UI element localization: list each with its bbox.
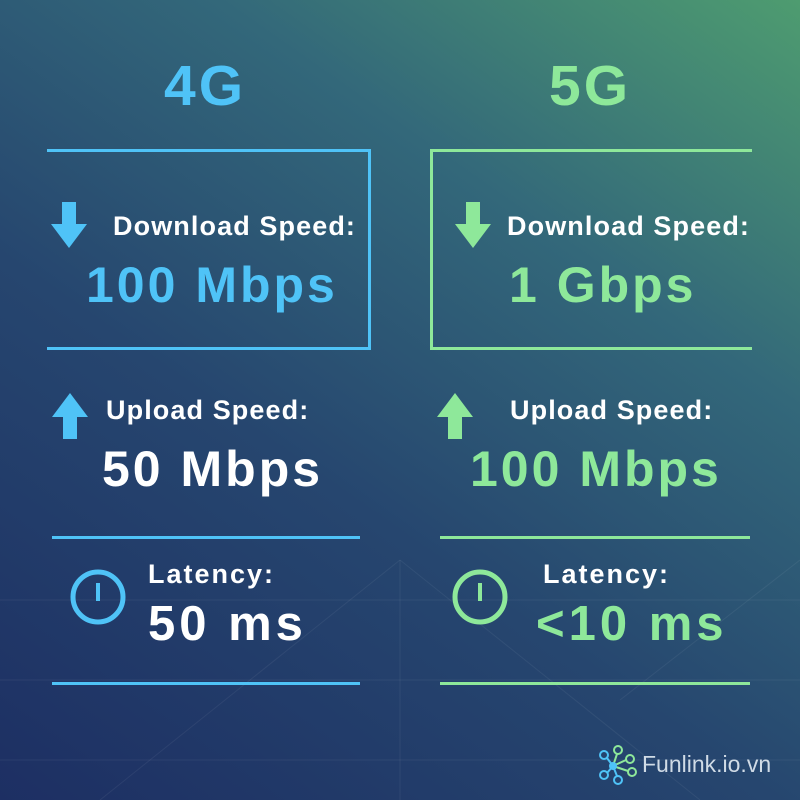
panel: 4G download bbox=[47, 149, 371, 350]
icon: up arrow bbox=[52, 393, 88, 439]
panel: 5G download bbox=[430, 149, 752, 350]
4G upload bbox=[52, 393, 323, 497]
title: 4G: 4G bbox=[164, 54, 246, 118]
label: Download Speed: bbox=[507, 211, 750, 241]
5G latency: <10 ms bbox=[536, 597, 728, 651]
5G upload: Upload Speed: bbox=[510, 395, 713, 425]
label: Download Speed: bbox=[113, 211, 356, 241]
value: 1 Gbps bbox=[509, 257, 696, 313]
4G latency bbox=[70, 559, 307, 651]
4G latency: 50 ms bbox=[148, 597, 307, 651]
5G upload: 100 Mbps bbox=[470, 441, 722, 497]
icon: clock bbox=[452, 570, 508, 624]
5G upload bbox=[437, 393, 722, 497]
4G upload: 50 Mbps bbox=[102, 441, 323, 497]
icon: network bbox=[599, 745, 637, 785]
title: 5G: 5G bbox=[549, 54, 631, 118]
icon: down arrow bbox=[51, 202, 87, 248]
icon: down arrow bbox=[455, 202, 491, 248]
5G latency: Latency: bbox=[543, 559, 670, 589]
icon: clock bbox=[70, 570, 126, 624]
value: 100 Mbps bbox=[86, 257, 338, 313]
4G latency: Latency: bbox=[148, 559, 275, 589]
logo: Funlink.io.vn bbox=[642, 751, 771, 777]
5G latency bbox=[452, 559, 728, 651]
4G upload: Upload Speed: bbox=[106, 395, 309, 425]
logo bbox=[599, 745, 771, 785]
icon: up arrow bbox=[437, 393, 473, 439]
